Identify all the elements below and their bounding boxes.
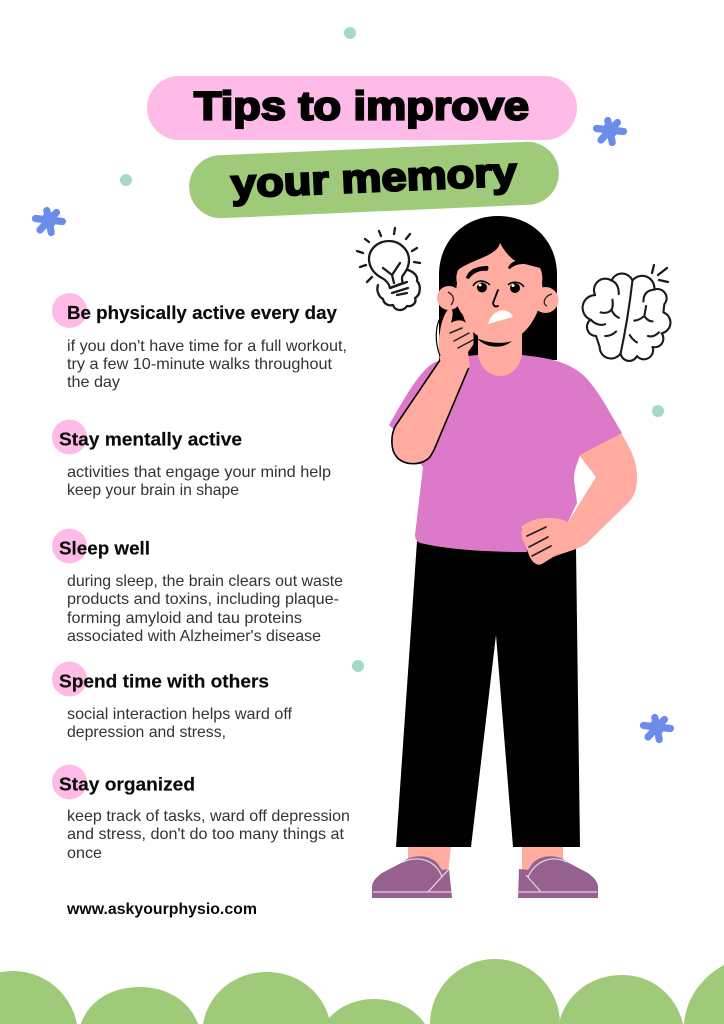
illustration: woman thinking (372, 216, 637, 898)
tip 4: Spend time with others (59, 670, 269, 692)
tip 2: keep your brain in shape (67, 482, 239, 499)
hair behind hand (452, 312, 478, 352)
tip 1: the day (67, 374, 120, 391)
tip 5: Stay organized (59, 774, 195, 794)
website url: www.askyourphysio.com (66, 901, 257, 918)
face (455, 243, 542, 343)
bottom hills (0, 959, 724, 1024)
tip 1: if you don't have time for a full workout, (67, 338, 347, 355)
tip 2: Stay mentally active (59, 428, 242, 450)
tip 4: social interaction helps ward off (67, 706, 293, 723)
title: line two (188, 140, 560, 220)
hand on hip (522, 518, 590, 564)
tip 1 (52, 293, 347, 391)
tip 5: and stress, don't do too many things at (67, 826, 345, 843)
hand at cheek (436, 309, 474, 370)
jaw shadow (477, 338, 512, 347)
icon: brain (583, 265, 670, 361)
ear curls (448, 292, 552, 306)
tip 3: products and toxins, including plaque- (67, 591, 339, 608)
forearm with outline (392, 345, 469, 464)
nose (493, 290, 498, 307)
eyes (473, 281, 524, 293)
title: line one (147, 76, 577, 140)
pants (396, 541, 580, 847)
icon: blue star top right (596, 120, 624, 142)
tip 5: keep track of tasks, ward off depression (67, 808, 350, 825)
tip 3: Sleep well (59, 538, 150, 558)
tip 4: depression and stress, (67, 724, 226, 741)
ears (437, 286, 558, 313)
hair (439, 216, 557, 360)
tip 1: try a few 10-minute walks throughout (67, 356, 333, 373)
neck (478, 330, 522, 376)
tip 3 (52, 528, 343, 645)
tip 5: once (67, 845, 102, 862)
right arm (521, 433, 637, 565)
icon: blue star lower right (644, 718, 670, 740)
tip 2: activities that engage your mind help (67, 464, 331, 481)
tip 5 (52, 764, 350, 862)
tip 3: during sleep, the brain clears out waste (67, 573, 343, 590)
tip 2 (52, 420, 331, 499)
icon: blue star left (36, 210, 62, 232)
tip 4 (52, 662, 293, 741)
eyebrows (466, 260, 533, 279)
tip 3: associated with Alzheimer's disease (67, 628, 321, 645)
legs (408, 845, 563, 875)
icon: light bulb (357, 228, 420, 310)
title: line one: Tips to improve (194, 84, 529, 128)
tip 1: Be physically active every day (67, 302, 338, 323)
decorative dots (120, 27, 664, 672)
shirt (389, 355, 622, 552)
shoes (372, 856, 598, 898)
title: line two: your memory (230, 150, 519, 207)
mouth (488, 310, 513, 324)
tip 3: forming amyloid and tau proteins (67, 610, 302, 627)
